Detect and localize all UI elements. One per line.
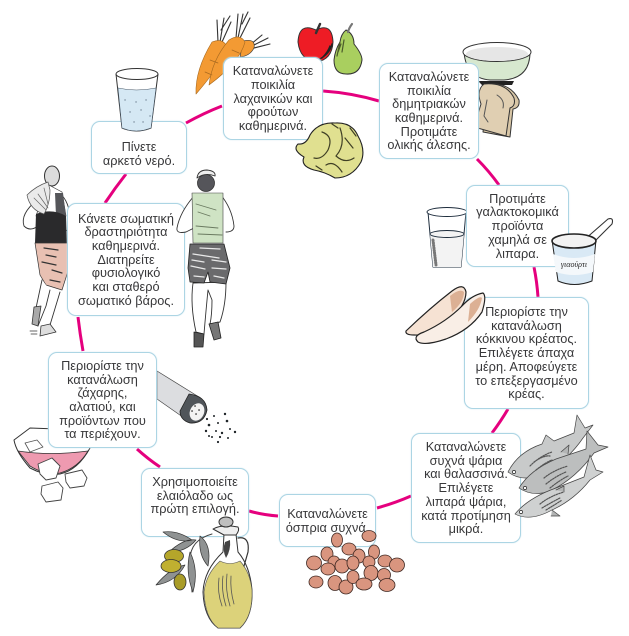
card: fish: και θαλασσινά. — [424, 466, 508, 481]
icon: weighing bowl with grains — [463, 42, 531, 85]
icon: yogurt pot with spoon: γιαούρτι — [561, 260, 587, 269]
card: fish: λιπαρά ψάρια, — [426, 494, 506, 509]
icon: bread slice — [474, 84, 519, 137]
card: vegetables and fruit: ποικιλία — [251, 77, 295, 92]
card: dairy: λιπαρα. — [496, 246, 539, 261]
card: red meat: το επεξεργασμένο — [475, 373, 578, 388]
icon: glass of milk — [427, 208, 467, 267]
icon: three fish — [508, 415, 608, 517]
icon: carrots — [196, 12, 270, 94]
card: dairy: χαμηλά σε — [488, 232, 547, 247]
card: olive oil: Χρησιμοποιείτε — [152, 474, 238, 489]
card: water: Πίνετε — [122, 139, 156, 154]
card: vegetables and fruit: καθημερινά. — [239, 118, 307, 133]
card: cereals — [379, 63, 479, 159]
card: red meat: Περιορίστε την — [485, 304, 568, 319]
card: vegetables and fruit: λαχανικών και — [233, 91, 312, 106]
icon: sugar cubes — [38, 458, 87, 502]
card: legumes: όσπρια συχνά. — [286, 520, 369, 534]
icon: man runner — [177, 170, 234, 347]
card: physical activity: φυσιολογικό — [92, 265, 160, 280]
card: sugar and salt: αλατιού, και — [69, 399, 136, 414]
card: fish: Καταναλώνετε — [426, 439, 506, 454]
card: cereals: ποικιλία — [407, 83, 451, 98]
icon: water glass — [116, 68, 158, 131]
card: dairy: προϊόντα — [492, 218, 543, 233]
card: fish — [411, 433, 521, 543]
card: physical activity: σωματικό βάρος. — [78, 293, 174, 308]
card: cereals: δημητριακών — [392, 96, 466, 111]
card: sugar and salt: τα περιέχουν. — [64, 426, 141, 441]
icon: lettuce — [296, 123, 363, 178]
card: fish: συχνά ψάρια — [430, 453, 502, 468]
card: red meat — [464, 297, 589, 409]
icon: sugar bowl — [14, 428, 90, 474]
card: vegetables and fruit: Καταναλώνετε — [233, 63, 313, 78]
card: legumes — [279, 494, 376, 547]
card: fish: Επιλέγετε — [438, 480, 493, 495]
card: cereals: καθημερινά. — [395, 110, 463, 125]
card: physical activity: Διατηρείτε — [97, 252, 155, 267]
card: sugar and salt: προϊόντων που — [59, 413, 146, 428]
card: cereals: Καταναλώνετε — [389, 69, 469, 84]
card: fish: μικρά. — [449, 521, 483, 536]
card: legumes: Καταναλώνετε — [287, 506, 368, 521]
icon: raw meat fillets — [406, 287, 485, 343]
icon: pear — [334, 24, 362, 74]
card: red meat: μέρη. Αποφεύγετε — [476, 359, 577, 374]
card: fish: κατά προτίμηση — [421, 508, 511, 523]
card: physical activity: και σταθερό — [92, 279, 160, 294]
card: dairy: Προτιμάτε — [489, 191, 546, 206]
card: dairy — [466, 185, 569, 267]
card: physical activity: Κάνετε σωματική — [78, 211, 174, 226]
card: vegetables and fruit: φρούτων — [248, 104, 298, 119]
card: vegetables and fruit — [223, 57, 323, 140]
card: cereals: ολικής άλεσης. — [387, 137, 471, 152]
icon: apple — [298, 24, 333, 62]
card: cereals: Προτιμάτε — [401, 124, 457, 139]
card: water — [91, 121, 187, 174]
card: olive oil — [141, 468, 249, 537]
card: dairy: γαλακτοκομικά — [476, 204, 559, 219]
card: olive oil: ελαιόλαδο ως — [157, 488, 233, 503]
icon: woman runner — [23, 166, 71, 336]
icon: beans — [306, 530, 404, 594]
card: red meat: κρέας. — [508, 386, 545, 401]
card: sugar and salt: Περιορίστε την — [61, 358, 144, 373]
card: olive oil: πρώτη επιλογή. — [150, 501, 240, 516]
card: physical activity — [67, 203, 185, 316]
card: physical activity: δραστηριότητα — [84, 224, 168, 239]
icon: salt shaker — [157, 371, 236, 443]
card: red meat: κόκκινου κρέατος. — [476, 331, 577, 346]
card: red meat: κατανάλωση — [491, 318, 562, 333]
icon: yogurt pot with spoon — [552, 219, 612, 284]
card: sugar and salt: κατανάλωση — [67, 372, 138, 387]
card: red meat: Επιλέγετε άπαχα — [479, 345, 574, 360]
card: sugar and salt: ζάχαρης, — [78, 385, 127, 400]
icon: olive oil bottle — [203, 517, 252, 628]
card: water: αρκετό νερό. — [103, 152, 175, 168]
card: sugar and salt — [48, 352, 157, 448]
card: physical activity: καθημερινά. — [92, 238, 160, 253]
icon: olive branch — [156, 532, 212, 592]
